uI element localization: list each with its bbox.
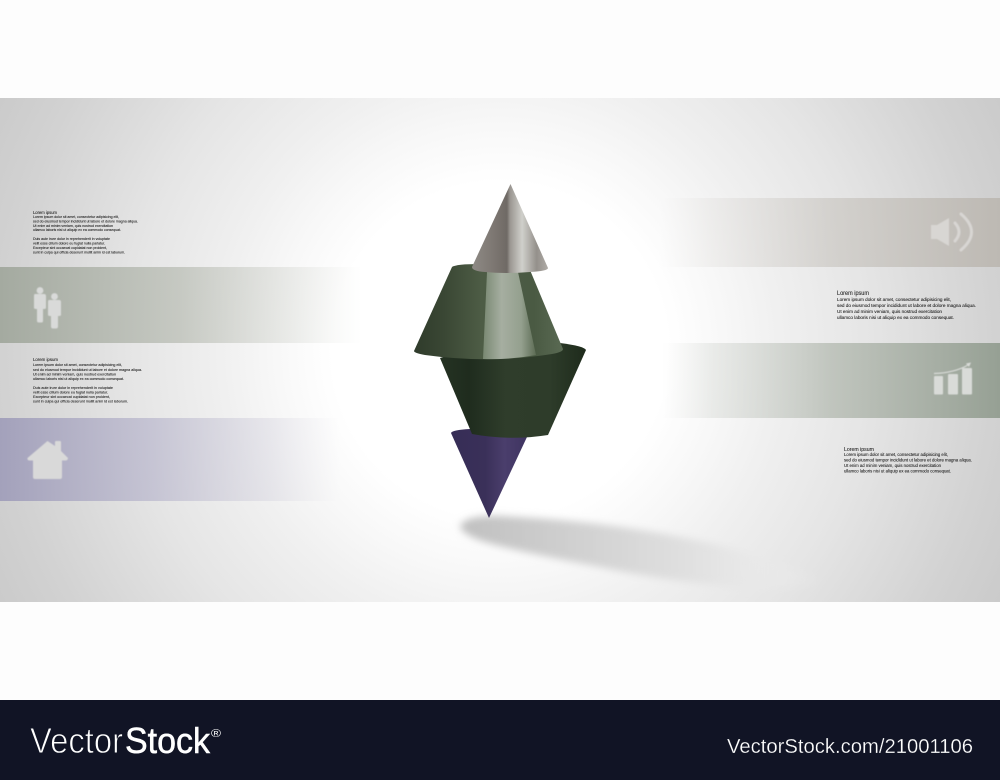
band: right chart band: [662, 343, 1000, 418]
band: left house band: [0, 418, 340, 501]
heading: Lorem ipsum: [844, 447, 874, 453]
body copy: Lorem ipsum dolor sit amet, consectetur adipisicing elit,: [33, 363, 122, 367]
text block: right upper: [837, 291, 976, 321]
body copy: Duis aute irure dolor in reprehenderit in voluptate: [33, 386, 113, 390]
green frustum body: [414, 264, 563, 359]
footer image id: VectorStock.com/21001106: [727, 736, 973, 758]
segment: green frustum: [414, 264, 563, 359]
body copy: sed do eiusmod tempor incididunt ut labore et dolore magna aliqua.: [837, 303, 976, 309]
footer bar: [0, 700, 1000, 780]
body copy: [844, 452, 972, 473]
heading: Lorem ipsum: [33, 357, 58, 363]
body copy: sed do eiusmod tempor incididunt ut labore et dolore magna aliqua.: [33, 220, 138, 224]
segment: dark green frustum: [440, 340, 586, 438]
body copy: [837, 297, 976, 321]
body copy: Excepteur sint occaecat cupidatat non proident,: [33, 246, 107, 250]
body copy: Excepteur sint occaecat cupidatat non proident,: [33, 395, 110, 399]
panel: main grey backdrop: [0, 98, 1000, 602]
body copy: Ut enim ad minim veniam, quis nostrud exercitation: [33, 224, 113, 228]
registered mark: ®: [211, 728, 221, 740]
body copy: ullamco laboris nisi ut aliquip ex ea commodo consequat.: [844, 468, 951, 473]
body copy: [33, 215, 138, 254]
icon: bar chart: [934, 362, 972, 394]
body copy: velit esse cillum dolore eu fugiat nulla pariatur.: [33, 242, 105, 246]
logo word: Vector: Vector: [30, 720, 123, 761]
chart: stacked spindle of cones: [414, 184, 586, 518]
segment: top grey cone: [472, 184, 548, 273]
body copy: [33, 363, 142, 404]
body copy: velit esse cillum dolore eu fugiat nulla pariatur.: [33, 390, 108, 394]
icon: people: [34, 287, 61, 328]
body copy: Ut enim ad minim veniam, quis nostrud exercitation: [844, 463, 942, 468]
body copy: Lorem ipsum dolor sit amet, consectetur adipisicing elit,: [837, 297, 951, 303]
text block: right lower: [844, 447, 972, 473]
body copy: Ut enim ad minim veniam, quis nostrud exercitation: [33, 372, 116, 376]
body copy: sunt in culpa qui officia deserunt mollit anim id est laborum.: [33, 400, 128, 404]
body copy: ullamco laboris nisi ut aliquip ex ea commodo consequat.: [837, 315, 954, 321]
body copy: sunt in culpa qui officia deserunt mollit anim id est laborum.: [33, 250, 125, 254]
heading: Lorem ipsum: [837, 291, 869, 297]
body copy: sed do eiusmod tempor incididunt ut labore et dolore magna aliqua.: [844, 458, 972, 462]
text block: left lower: [33, 357, 142, 404]
band: right speaker band: [660, 198, 1000, 267]
body copy: Duis aute irure dolor in reprehenderit in voluptate: [33, 237, 110, 241]
text block: left upper: [33, 210, 138, 254]
segment: bottom purple cone: [451, 429, 527, 518]
heading: Lorem ipsum: [33, 210, 57, 215]
footer logo: [30, 720, 221, 761]
ground shadow: [458, 512, 724, 582]
body copy: Ut enim ad minim veniam, quis nostrud exercitation: [837, 309, 942, 315]
logo word: Stock: Stock: [125, 720, 211, 761]
icon: speaker: [931, 214, 972, 250]
body copy: Lorem ipsum dolor sit amet, consectetur adipisicing elit,: [33, 215, 119, 219]
body copy: sed do eiusmod tempor incididunt ut labore et dolore magna aliqua.: [33, 368, 142, 372]
band: left people band: [0, 267, 362, 343]
body copy: ullamco laboris nisi ut aliquip ex ea commodo consequat.: [33, 377, 124, 381]
body copy: Lorem ipsum dolor sit amet, consectetur adipisicing elit,: [844, 452, 948, 457]
green frustum highlight: [483, 272, 536, 359]
body copy: ullamco laboris nisi ut aliquip ex ea commodo consequat.: [33, 228, 121, 232]
icon: house: [27, 441, 68, 479]
